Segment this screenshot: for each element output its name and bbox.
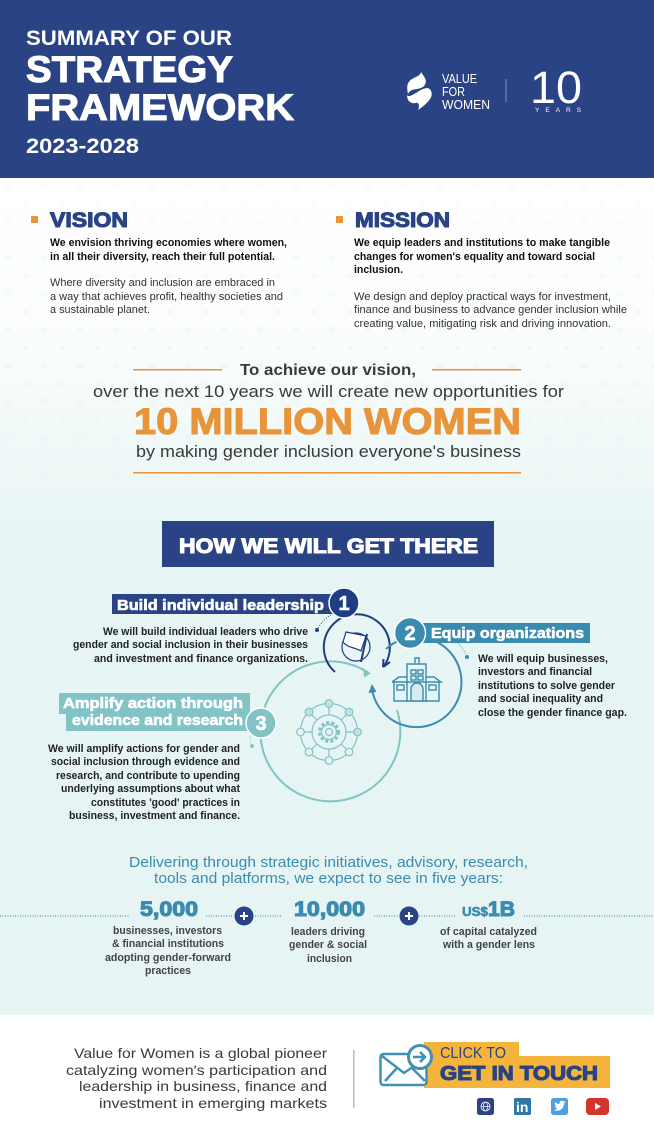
step 2: equip organizations: 2: [404, 623, 416, 645]
step 3: amplify action: evidence and research: [72, 713, 243, 729]
title: SUMMARY OF OUR: [26, 27, 232, 50]
panel: vision: a way that achieves profit, healthy societies and: [50, 291, 283, 303]
stat: 10,000: leaders driving: [291, 926, 365, 938]
call to action button: [380, 1042, 610, 1088]
footer text: [66, 1045, 327, 1111]
stat: 5,000: & financial institutions: [112, 938, 224, 950]
step 1: build individual leadership: gender and social inclusion in their businesses: [73, 639, 308, 651]
panel: vision: in all their diversity, reach their full potential.: [50, 251, 275, 263]
footer panel: [0, 1015, 654, 1146]
footer text: leadership in business, finance and: [79, 1078, 327, 1094]
step 2: equip organizations: close the gender finance gap.: [478, 707, 627, 719]
footer text: Value for Women is a global pioneer: [74, 1045, 327, 1061]
panel: vision: [31, 209, 287, 316]
goal statement: [93, 362, 565, 474]
logo: Value for Women 10 years: YEARS: [535, 107, 582, 114]
title: STRATEGY: [26, 48, 233, 90]
icon: flag: [342, 632, 370, 662]
dotted timeline with plus icons: [0, 906, 654, 926]
call to action button: CLICK TO: [440, 1045, 506, 1062]
step 3: amplify action: Amplify action through: [63, 696, 243, 712]
goal statement: To achieve our vision,: [240, 362, 416, 379]
panel: mission: finance and business to advance gender inclusion while: [354, 304, 627, 316]
panel: mission: We equip leaders and institutions to make tangible: [354, 237, 610, 249]
logo: Value for Women 10 years: FOR: [442, 85, 465, 99]
delivering heading: Delivering through strategic initiatives, advisory, research,: [129, 854, 528, 871]
step 3: amplify action: 3: [255, 713, 267, 735]
heading: how we will get there: [162, 521, 494, 567]
step 3: amplify action: business, investment and finance.: [69, 810, 240, 822]
icon: website: [477, 1098, 494, 1115]
step 3: amplify action: We will amplify actions for gender and: [48, 743, 240, 755]
step 3: amplify action: underlying assumptions about what: [61, 783, 240, 795]
stat: 5,000: 5,000: [140, 898, 198, 921]
logo: Value for Women 10 years: [407, 62, 582, 114]
step 2: equip organizations: Equip organizations: [431, 626, 584, 642]
step 3: amplify action: constitutes 'good' practices in: [91, 797, 240, 809]
step 2: equip organizations: institutions to solve gender: [478, 680, 616, 692]
panel: mission: creating value, mitigating risk and driving innovation.: [354, 318, 611, 330]
icon: youtube: [586, 1098, 609, 1115]
title: [26, 27, 294, 158]
title: FRAMEWORK: [26, 86, 294, 128]
stat: 5,000: practices: [145, 965, 191, 977]
stat: 5,000: adopting gender-forward: [105, 952, 231, 964]
title: 2023-2028: [26, 135, 139, 158]
step 1: build individual leadership: 1: [338, 593, 350, 615]
goal statement: over the next 10 years we will create new opportunities for: [93, 383, 565, 401]
stat: 10,000: gender & social: [289, 939, 367, 951]
stat: 5,000: businesses, investors: [113, 925, 222, 937]
goal statement: by making gender inclusion everyone's business: [136, 442, 521, 461]
panel: vision: a sustainable planet.: [50, 304, 150, 316]
stat: US$1B: US$: [462, 904, 489, 919]
panel: mission: [336, 209, 627, 330]
logo: Value for Women 10 years: VALUE: [442, 72, 477, 86]
stat: US$1B: of capital catalyzed: [440, 926, 537, 938]
step 3: amplify action: research, and contribute to upending: [56, 770, 240, 782]
header panel: [0, 0, 654, 178]
footer text: investment in emerging markets: [99, 1095, 327, 1111]
step 2: equip organizations: investors and financial: [478, 666, 592, 678]
step 3: amplify action: [48, 693, 276, 822]
icon: linkedin: in: [516, 1099, 528, 1115]
step 2: equip organizations: We will equip businesses,: [478, 653, 608, 665]
step 3: amplify action: social inclusion through evidence and: [51, 756, 240, 768]
step 1: build individual leadership: and investment and finance organizations.: [94, 653, 308, 665]
panel: mission: We design and deploy practical ways for investment,: [354, 291, 611, 303]
step 1: build individual leadership: We will build individual leaders who drive: [103, 626, 308, 638]
step 1: build individual leadership: Build individual leadership: [117, 598, 324, 614]
delivering heading: [129, 854, 528, 887]
icon: linkedin: [514, 1098, 531, 1115]
call to action button: GET IN TOUCH: [440, 1063, 598, 1085]
panel: mission: inclusion.: [354, 264, 403, 276]
stat: 10,000: [289, 898, 367, 965]
logo: Value for Women 10 years: 10: [530, 62, 582, 113]
heading: how we will get there: HOW WE WILL GET THERE: [179, 535, 478, 558]
panel: mission: changes for women's equality and toward social: [354, 251, 595, 263]
panel: vision: Where diversity and inclusion are embraced in: [50, 277, 275, 289]
panel: mission: MISSION: [355, 209, 450, 232]
icon: building: [392, 658, 441, 702]
page background: [0, 274, 654, 1015]
stat: US$1B: 1B: [488, 898, 515, 921]
stat: US$1B: with a gender lens: [442, 939, 535, 951]
panel: vision: VISION: [50, 209, 128, 232]
panel: vision: We envision thriving economies where women,: [50, 237, 287, 249]
goal statement: 10 MILLION WOMEN: [134, 400, 521, 442]
step 2: equip organizations: and social inequality and: [478, 693, 603, 705]
stat: 10,000: 10,000: [294, 898, 365, 921]
icon: gear network: [297, 700, 361, 764]
step 1: build individual leadership: [73, 588, 359, 665]
delivering heading: tools and platforms, we expect to see in five years:: [154, 870, 503, 887]
step 2: equip organizations: [394, 618, 627, 719]
stat: 5,000: [105, 898, 231, 977]
stat: 10,000: inclusion: [307, 953, 352, 965]
logo: Value for Women 10 years: WOMEN: [442, 98, 490, 112]
footer text: catalyzing women's participation and: [66, 1062, 327, 1078]
icon: twitter: [551, 1098, 568, 1115]
cycle diagram arcs: [260, 614, 461, 801]
stat: US$1B: [440, 898, 537, 951]
